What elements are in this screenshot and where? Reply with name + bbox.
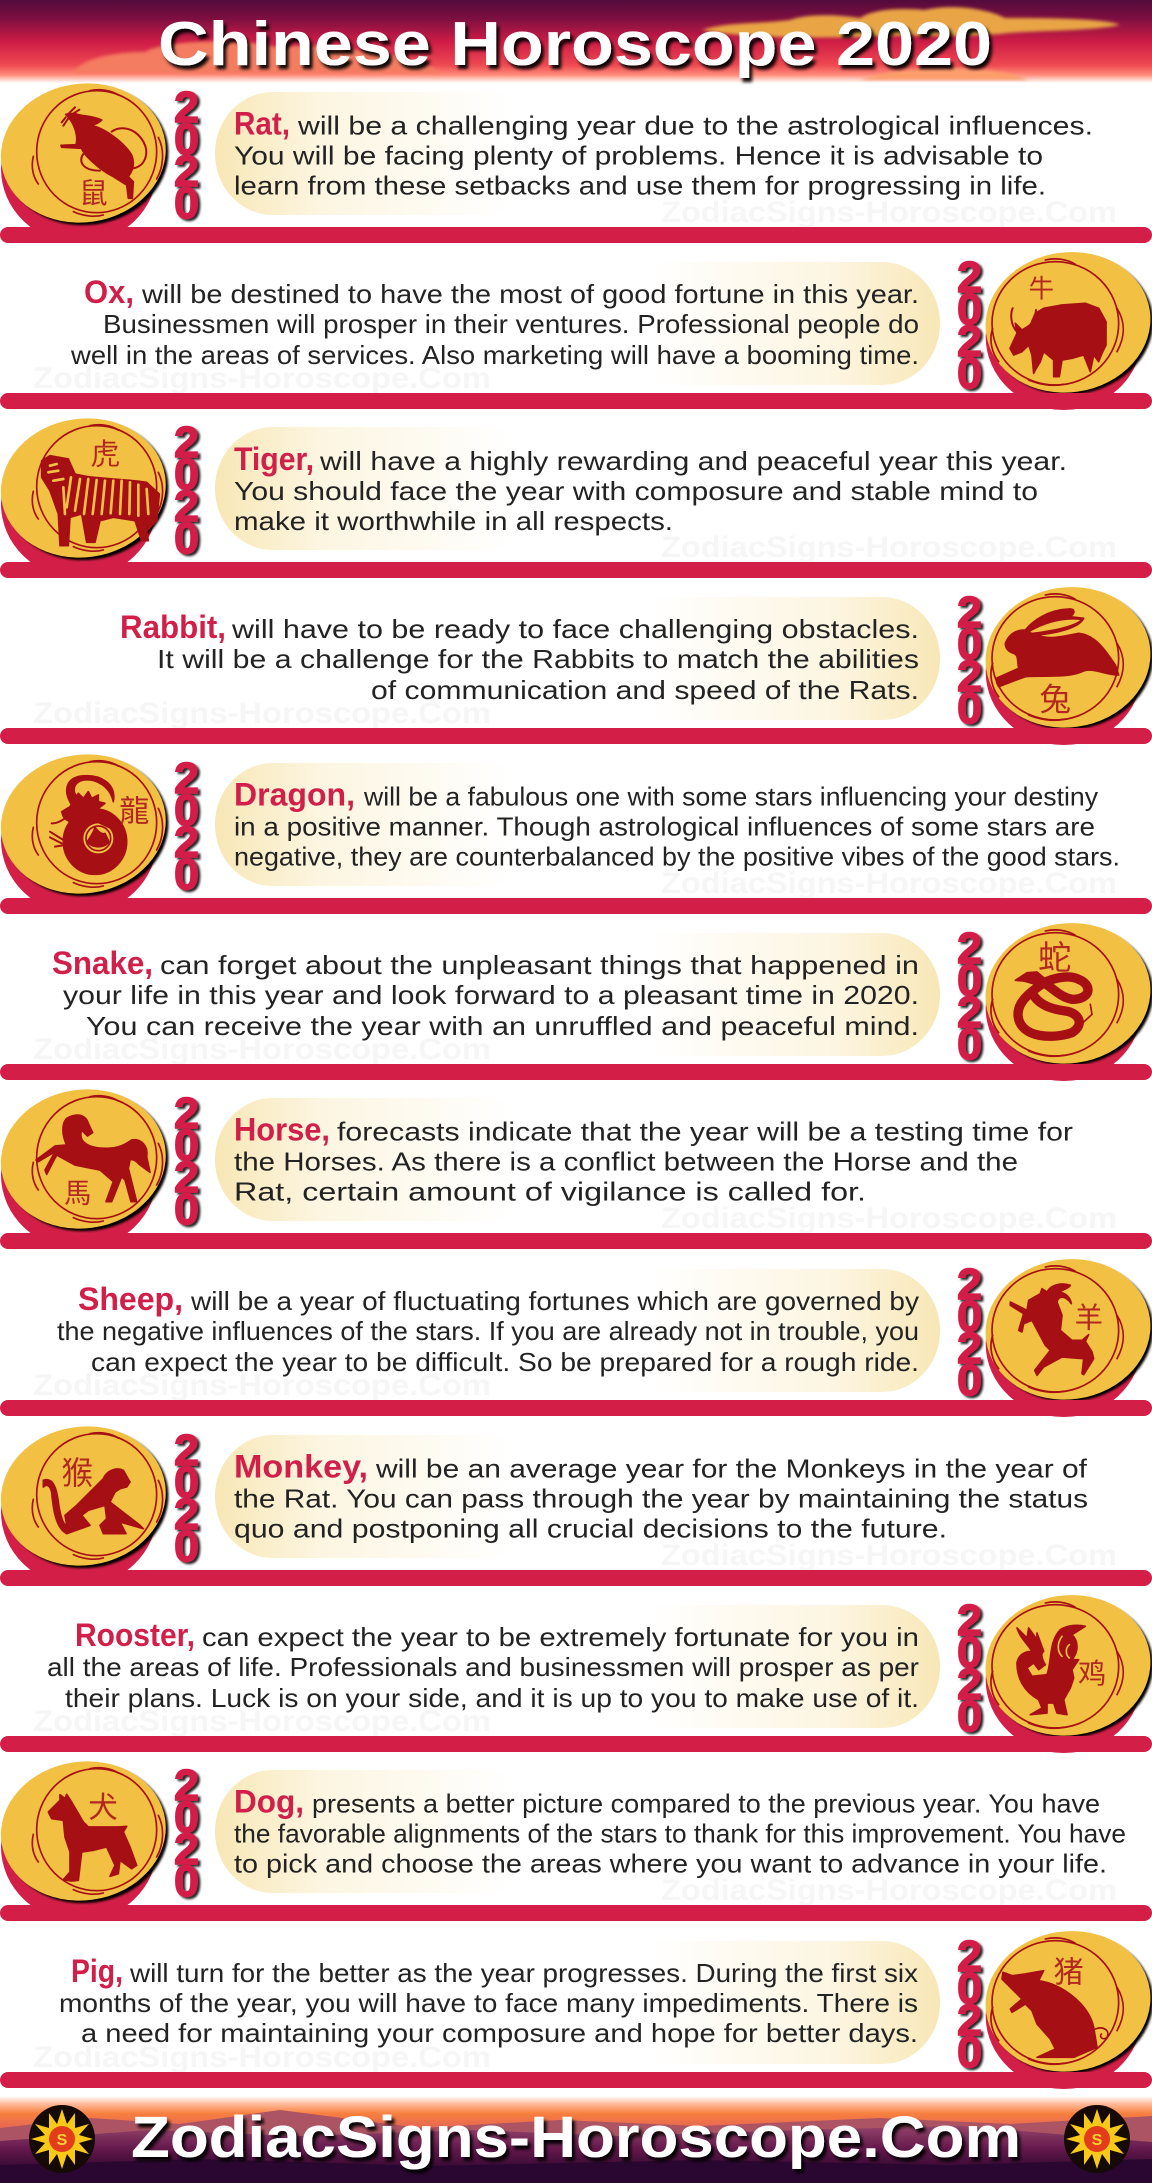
2020 vertical <box>957 1260 982 1405</box>
description: forecasts indicate that the year will be a testing time for <box>337 1116 1073 1146</box>
divider bar <box>0 1233 1152 1249</box>
description: will be destined to have the most of good fortune in this year. <box>141 279 919 309</box>
row: Horse <box>0 1079 1152 1249</box>
icon: pig medal: 猪 <box>1054 1957 1084 1990</box>
icon: footer left emblem <box>29 2105 95 2173</box>
description <box>234 106 1093 200</box>
description: the Rat. You can pass through the year by maintaining the status <box>234 1484 1088 1514</box>
description: make it worthwhile in all respects. <box>234 506 673 536</box>
2020 vertical <box>174 1426 199 1571</box>
2020 vertical <box>174 1761 199 1906</box>
2020 vertical <box>174 418 199 563</box>
watermark: ZodiacSigns-Horoscope.Com <box>661 1202 1117 1235</box>
row: Sheep <box>0 1249 1152 1417</box>
description: months of the year, you will have to face many impediments. There is <box>59 1988 918 2018</box>
2020 vertical <box>957 1596 982 1741</box>
text pill <box>610 1605 940 1728</box>
description: Dragon, <box>234 776 355 812</box>
description: will be a year of fluctuating fortunes which are governed by <box>190 1286 919 1316</box>
icon: rooster medal <box>976 1585 1152 1753</box>
description: Rat, certain amount of vigilance is called for. <box>234 1176 866 1206</box>
description <box>120 609 919 705</box>
row: Ox <box>0 242 1152 410</box>
description <box>47 1617 919 1713</box>
description: Dog, <box>234 1784 304 1820</box>
description: Rat, <box>234 106 290 142</box>
description: presents a better picture compared to the previous year. You have <box>312 1788 1100 1818</box>
row: Snake <box>0 913 1152 1081</box>
description: will be an average year for the Monkeys in the year of <box>375 1454 1088 1484</box>
icon: footer left emblem: S <box>57 2132 68 2149</box>
icon: dog medal: 犬 <box>88 1792 118 1825</box>
watermark: ZodiacSigns-Horoscope.Com <box>661 196 1117 229</box>
icon: ox medal: 牛 <box>1029 276 1054 304</box>
icon: snake medal <box>976 913 1152 1081</box>
text pill <box>215 763 545 886</box>
icon: monkey medal: 猴 <box>61 1455 93 1491</box>
description: You can receive the year with an unruffled and peaceful mind. <box>86 1011 919 1041</box>
watermark: ZodiacSigns-Horoscope.Com <box>661 1874 1117 1907</box>
icon: rabbit medal <box>976 577 1152 745</box>
icon: monkey medal <box>0 1416 178 1586</box>
description <box>59 1953 918 2048</box>
icon: dragon medal <box>0 744 178 914</box>
description: will be a fabulous one with some stars influencing your destiny <box>363 782 1098 812</box>
description: can expect the year to be difficult. So be prepared for a rough ride. <box>91 1347 919 1377</box>
divider bar <box>0 728 1152 744</box>
description: of communication and speed of the Rats. <box>371 675 919 705</box>
description: can expect the year to be extremely fortunate for you in <box>202 1622 919 1652</box>
divider bar <box>0 1064 1152 1080</box>
description: will have a highly rewarding and peaceful year this year. <box>319 446 1067 476</box>
divider bar <box>0 1905 1152 1921</box>
icon: pig medal <box>976 1921 1152 2089</box>
description: the favorable alignments of the stars to thank for this improvement. You have <box>234 1818 1126 1848</box>
watermark: ZodiacSigns-Horoscope.Com <box>661 531 1117 564</box>
2020 vertical <box>957 588 982 733</box>
watermark: ZodiacSigns-Horoscope.Com <box>33 2041 491 2074</box>
2020 vertical <box>174 1089 199 1234</box>
text pill <box>610 933 940 1056</box>
row: Rooster <box>0 1585 1152 1753</box>
description: You will be facing plenty of problems. Hence it is advisable to <box>234 140 1043 170</box>
watermark: ZodiacSigns-Horoscope.Com <box>33 362 491 395</box>
description: will turn for the better as the year progresses. During the first six <box>129 1958 918 1988</box>
icon: sheep medal <box>976 1249 1152 1417</box>
watermark: ZodiacSigns-Horoscope.Com <box>661 867 1117 900</box>
header banner <box>0 0 1152 83</box>
2020 vertical <box>174 83 199 228</box>
left cloud <box>73 41 440 73</box>
description: You should face the year with composure and stable mind to <box>234 476 1038 506</box>
text pill <box>610 597 940 720</box>
description: will be a challenging year due to the astrological influences. <box>297 110 1093 140</box>
description: to pick and choose the areas where you want to advance in your life. <box>234 1848 1107 1878</box>
icon: rat medal <box>0 73 178 243</box>
row: Rabbit <box>0 577 1152 745</box>
description: learn from these setbacks and use them for progressing in life. <box>234 170 1046 200</box>
text pill <box>610 1941 940 2064</box>
description: quo and postponing all crucial decisions to the future. <box>234 1514 947 1544</box>
icon: snake medal: 蛇 <box>1038 940 1071 977</box>
description: will have to be ready to face challenging obstacles. <box>231 614 919 644</box>
description <box>234 1784 1126 1878</box>
divider bar <box>0 898 1152 914</box>
row: Rat <box>0 73 1152 243</box>
icon: dog medal <box>0 1751 178 1921</box>
mountains <box>0 2110 1152 2183</box>
icon: tiger medal: 虎 <box>91 439 120 472</box>
description <box>234 1448 1088 1544</box>
icon: horse medal: 馬 <box>64 1177 91 1208</box>
description: can forget about the unpleasant things that happened in <box>160 950 919 980</box>
row: Dog <box>0 1751 1152 1921</box>
text pill <box>215 1770 545 1893</box>
text pill <box>215 1098 545 1221</box>
description: Snake, <box>52 945 153 981</box>
description: their plans. Luck is on your side, and it is up to you to make use of it. <box>65 1683 919 1713</box>
description: in a positive manner. Though astrological influences of some stars are <box>234 812 1095 842</box>
description <box>234 1112 1073 1206</box>
row: Monkey <box>0 1416 1152 1586</box>
description: the negative influences of the stars. If you are already not in trouble, you <box>57 1316 919 1346</box>
description <box>70 274 919 370</box>
icon: sheep medal: 羊 <box>1075 1302 1103 1334</box>
text pill <box>215 427 545 550</box>
description: Horse, <box>234 1112 330 1148</box>
watermark: ZodiacSigns-Horoscope.Com <box>33 697 491 730</box>
description: Monkey, <box>234 1448 368 1484</box>
icon: tiger medal <box>0 408 178 578</box>
text pill <box>215 1435 545 1558</box>
title: Chinese Horoscope 2020 <box>158 10 992 79</box>
2020 vertical <box>957 253 982 398</box>
description: Tiger, <box>234 441 314 477</box>
description: It will be a challenge for the Rabbits to match the abilities <box>157 644 919 674</box>
divider bar <box>0 2072 1152 2088</box>
icon: footer right emblem <box>1064 2105 1130 2173</box>
description: Pig, <box>71 1953 123 1989</box>
divider bar <box>0 1570 1152 1586</box>
2020 vertical <box>957 1932 982 2077</box>
divider bar <box>0 1400 1152 1416</box>
2020 vertical <box>957 924 982 1069</box>
divider bar <box>0 227 1152 243</box>
bottom cloud <box>860 68 1028 80</box>
description: Businessmen will prosper in their ventures. Professional people do <box>103 309 919 339</box>
footer website name: ZodiacSigns-Horoscope.Com <box>131 2105 1021 2170</box>
footer banner <box>0 2096 1152 2183</box>
description: Ox, <box>84 274 134 310</box>
watermark: ZodiacSigns-Horoscope.Com <box>33 1033 491 1066</box>
description: all the areas of life. Professionals and businessmen will prosper as per <box>47 1652 919 1682</box>
divider bar <box>0 1736 1152 1752</box>
right cloud <box>702 7 1120 37</box>
description: Sheep, <box>78 1281 183 1317</box>
icon: horse medal <box>0 1079 178 1249</box>
description <box>234 441 1067 536</box>
divider bar <box>0 393 1152 409</box>
icon: dragon medal: 龍 <box>119 796 149 829</box>
icon: ox medal <box>976 242 1152 410</box>
watermark: ZodiacSigns-Horoscope.Com <box>33 1705 491 1738</box>
row: Dragon <box>0 744 1152 914</box>
text pill <box>610 1269 940 1392</box>
2020 vertical <box>174 754 199 899</box>
description: negative, they are counterbalanced by the positive vibes of the good stars. <box>234 842 1120 872</box>
text pill <box>215 92 545 215</box>
description <box>234 776 1120 872</box>
description: a need for maintaining your composure and hope for better days. <box>81 2018 918 2048</box>
description: your life in this year and look forward to a pleasant time in 2020. <box>63 980 919 1010</box>
icon: footer right emblem: S <box>1092 2132 1103 2149</box>
description: Rooster, <box>75 1617 195 1653</box>
text pill <box>610 262 940 385</box>
description: Rabbit, <box>120 609 226 645</box>
description: the Horses. As there is a conflict between the Horse and the <box>234 1146 1018 1176</box>
description <box>52 945 919 1041</box>
row: Tiger <box>0 408 1152 578</box>
description: well in the areas of services. Also marketing will have a booming time. <box>70 340 919 370</box>
icon: rat medal: 鼠 <box>79 178 108 210</box>
row: Pig <box>0 1921 1152 2089</box>
divider bar <box>0 562 1152 578</box>
description <box>57 1281 919 1377</box>
watermark: ZodiacSigns-Horoscope.Com <box>661 1539 1117 1572</box>
icon: rooster medal: 鸡 <box>1078 1658 1106 1690</box>
icon: rabbit medal: 兔 <box>1039 682 1071 718</box>
watermark: ZodiacSigns-Horoscope.Com <box>33 1369 491 1402</box>
